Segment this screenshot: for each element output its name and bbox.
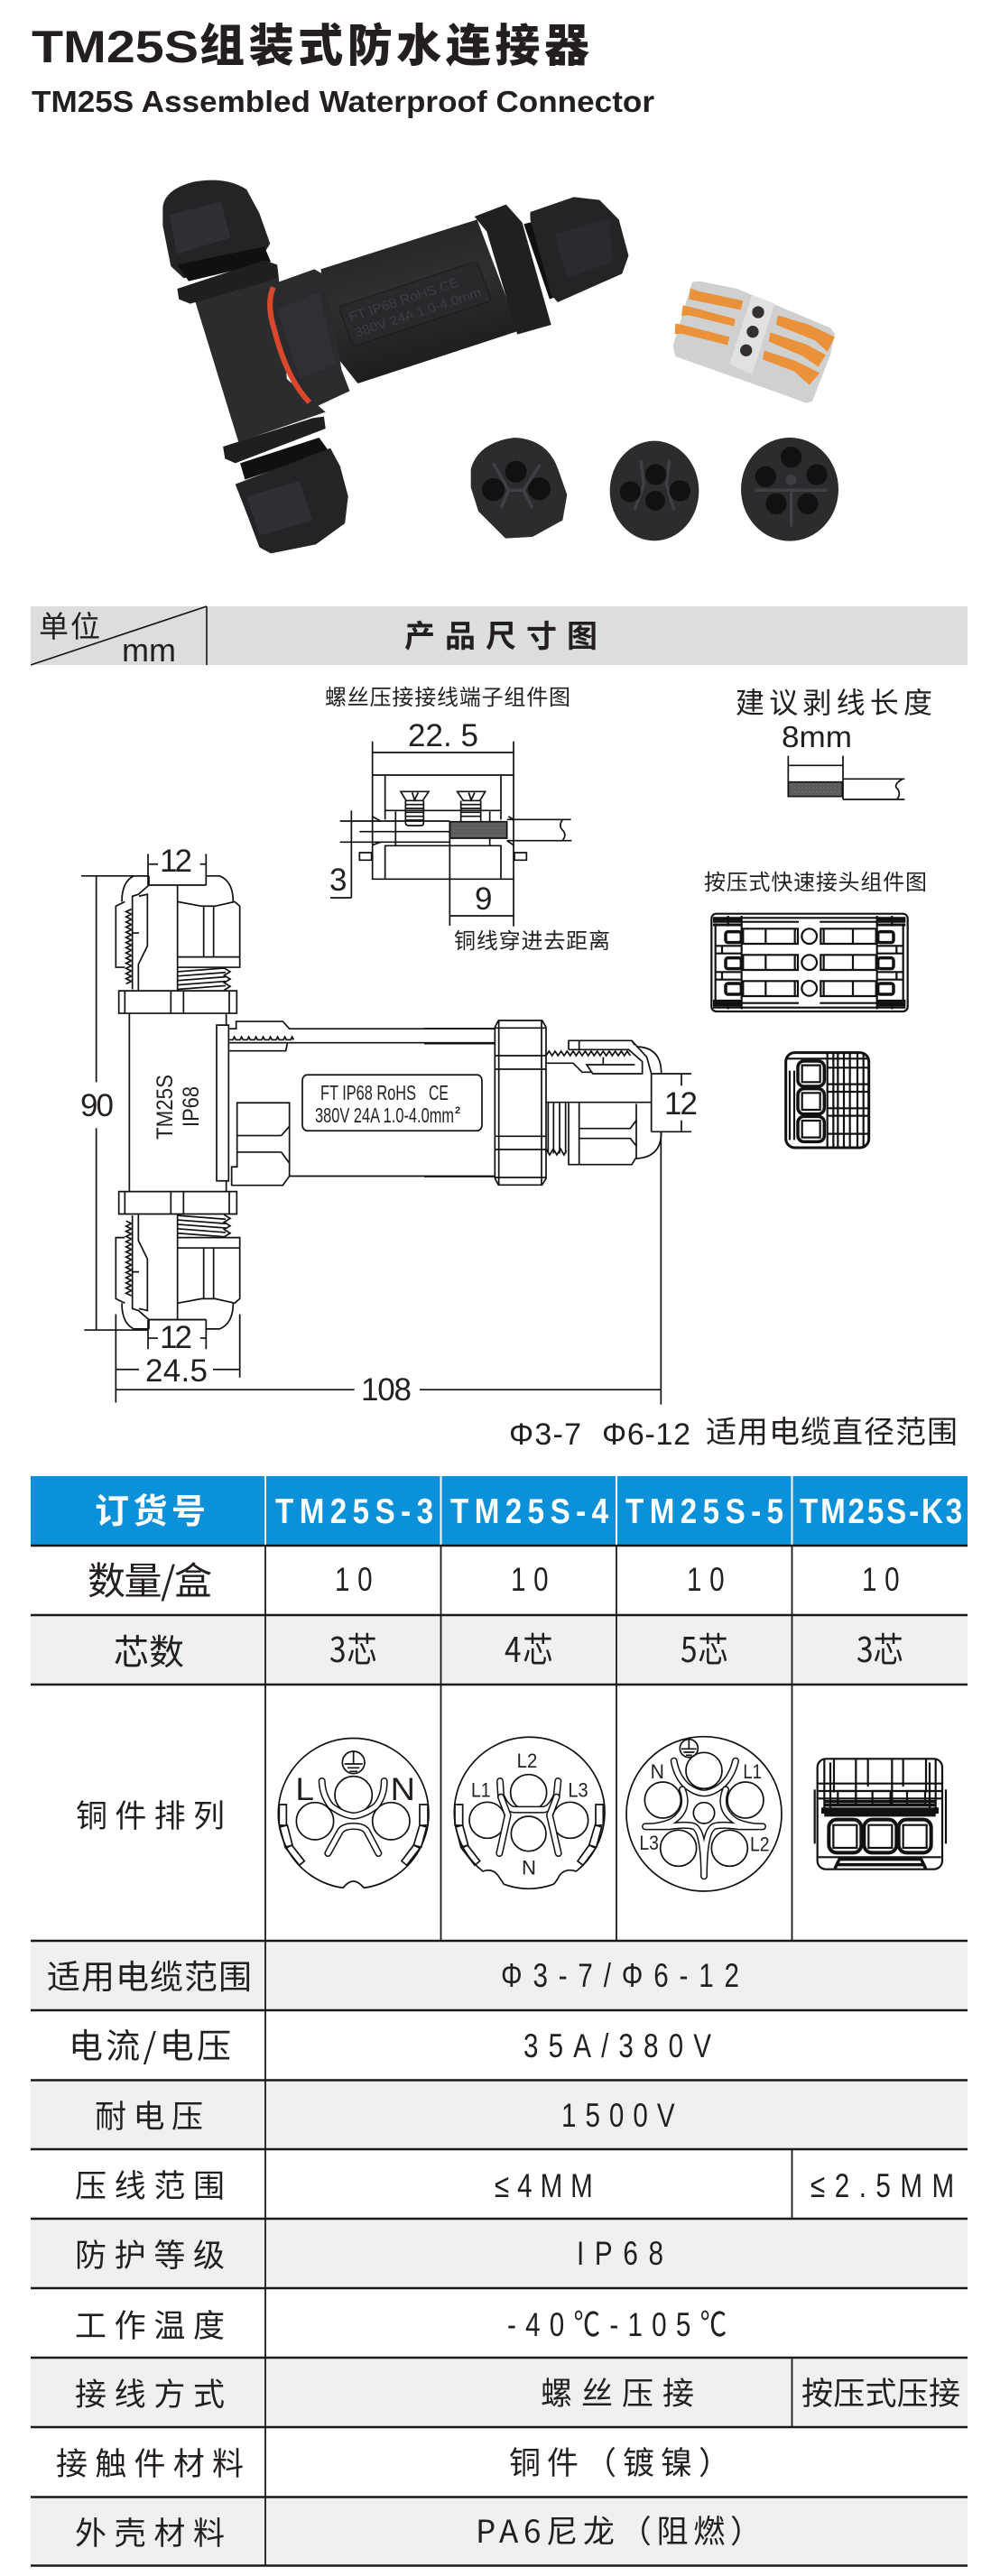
section header: product dimensions: 产品尺寸图 <box>404 612 597 656</box>
row: working temperature: -40℃-105℃ <box>507 2307 727 2344</box>
insert: 3-pole <box>471 438 567 539</box>
table header row: TM25S-K3 <box>800 1491 962 1531</box>
screw terminal assembly drawing <box>329 718 571 927</box>
row: core count: 4芯 <box>505 1622 553 1673</box>
strip length value: 8mm <box>782 720 852 753</box>
photo: push-in wire connector <box>673 282 835 403</box>
row: core count: 5芯 <box>681 1622 728 1673</box>
right flange <box>475 205 551 335</box>
subtitle: TM25S Assembled Waterproof Connector <box>32 85 654 118</box>
dimension: 90: 90 <box>80 1088 114 1123</box>
embossed label: 380V 24A 1.0-4.0mm <box>353 285 484 340</box>
row: current and voltage: 电流/电压 <box>69 2018 231 2068</box>
row: current and voltage: 35A/380V <box>523 2028 712 2065</box>
row: wire range: ≤2.5MM <box>810 2168 954 2205</box>
left hex nut <box>270 269 349 408</box>
row: protection grade <box>75 2230 663 2276</box>
dimension: 24.5: 24.5 <box>145 1353 208 1389</box>
pin diagram: 4-pole: L2 <box>517 1750 537 1772</box>
row: contact material <box>56 2438 730 2485</box>
specification table <box>31 1476 968 2566</box>
pin diagram: 5-pole: L3 <box>639 1832 659 1854</box>
pin diagram: 4-pole <box>454 1737 605 1888</box>
label text: FT IP68 RoHS CE: CE <box>429 1081 449 1104</box>
label text: FT IP68 RoHS CE: 380V 24A 1.0-4.0mm <box>315 1103 454 1127</box>
dimension: 12 right: 12 <box>664 1086 698 1122</box>
bottom flange <box>223 417 326 463</box>
title <box>32 10 589 75</box>
caption: copper wire insertion distance: 铜线穿进去距离 <box>454 923 610 955</box>
row: core count: 3芯 <box>329 1622 377 1673</box>
title: TM25S <box>32 22 199 72</box>
pin diagram: 4-pole: L1 <box>471 1778 491 1801</box>
row: housing material: PA6尼龙（阻燃） <box>476 2507 762 2553</box>
table header row: TM25S-3 <box>275 1491 433 1531</box>
row: copper arrangement label: 铜件排列 <box>76 1791 225 1837</box>
label text: FT IP68 RoHS CE: FT IP68 RoHS <box>320 1081 416 1104</box>
dimension lines <box>81 854 661 1402</box>
recommended strip length heading: 建议剥线长度 <box>736 680 932 722</box>
table header row: TM25S-4 <box>450 1491 608 1531</box>
pin diagram: 5-pole: L1 <box>743 1760 762 1783</box>
vertical T body <box>195 278 326 442</box>
row: wire range: 压线范围 <box>75 2161 225 2207</box>
label text: FT IP68 RoHS CE: 2 <box>455 1105 460 1116</box>
row: cable range: 适用电缆范围 <box>47 1950 252 1999</box>
cable range note: Φ3-7 <box>509 1417 581 1452</box>
cable range note: 适用电缆直径范围 <box>706 1408 958 1452</box>
row: wire range <box>75 2161 954 2207</box>
row: quantity per box: 10 <box>687 1562 725 1599</box>
pin diagram: 4-pole: N <box>522 1856 536 1879</box>
top flange <box>177 260 279 304</box>
stripped wire diagram <box>788 756 904 799</box>
row: contact material: 铜件（镀镍） <box>509 2438 730 2484</box>
row: contact material: 接触件材料 <box>56 2439 244 2485</box>
row: core count: 芯数 <box>114 1625 184 1676</box>
row: quantity per box: 10 <box>511 1562 549 1599</box>
row: wiring method: 按压式压接 <box>801 2368 960 2414</box>
dimension: 9: 9 <box>475 882 492 917</box>
row: protection grade: 防护等级 <box>75 2230 225 2276</box>
pin diagram: 5-pole: N <box>651 1760 664 1783</box>
title: 组装式防水连接器 <box>199 10 589 75</box>
embossed label <box>338 262 492 346</box>
right cable gland <box>530 197 628 302</box>
insert: 4-pole <box>610 441 699 540</box>
dimension: 108: 108 <box>361 1372 412 1408</box>
table header row: 订货号 <box>95 1483 206 1533</box>
neck thread <box>523 221 560 300</box>
row: current and voltage <box>69 2018 712 2068</box>
insert: 5-pole <box>741 438 838 541</box>
pin diagram: 5-pole: L2 <box>750 1833 770 1856</box>
row: core count <box>114 1622 903 1676</box>
push-in connector heading: 按压式快速接头组件图 <box>704 864 927 896</box>
row: quantity per box <box>88 1551 900 1606</box>
row: quantity per box: 数量/盒 <box>88 1551 212 1606</box>
row: cable range <box>47 1950 739 1999</box>
row: wiring method <box>75 2368 960 2415</box>
T body drawing <box>116 876 495 1329</box>
product photo: T-shaped black connector <box>162 180 628 553</box>
row: core count: 3芯 <box>857 1622 903 1673</box>
row: cable range: Φ3-7/Φ6-12 <box>501 1958 739 1995</box>
screw terminal heading: 螺丝压接接线端子组件图 <box>325 679 570 711</box>
dimension: 12 bottom: 12 <box>160 1320 192 1355</box>
row: protection grade: IP68 <box>577 2236 663 2273</box>
cable range note: Φ6-12 <box>602 1417 690 1452</box>
row: housing material <box>75 2507 762 2554</box>
table header row <box>31 1476 968 1546</box>
body marking TM25S IP68: TM25S <box>153 1075 178 1140</box>
cable range note <box>509 1408 958 1452</box>
section header: product dimensions <box>31 603 968 669</box>
row: working temperature: 工作温度 <box>75 2301 225 2347</box>
pin diagram: 3-pole: N <box>391 1772 415 1807</box>
body marking TM25S IP68 <box>153 1075 204 1140</box>
bottom cable gland <box>236 448 348 553</box>
embossed label: FT IP68 RoHS CE <box>347 275 461 325</box>
body marking TM25S IP68: IP68 <box>179 1086 204 1127</box>
row: withstand voltage <box>95 2091 675 2137</box>
push-in connector side view <box>786 1053 869 1148</box>
label text: FT IP68 RoHS CE <box>315 1081 460 1127</box>
photo: three contact inserts <box>471 438 838 541</box>
row: quantity per box: 10 <box>862 1562 900 1599</box>
unit cell: mm <box>122 632 176 669</box>
unit cell <box>31 603 207 669</box>
orange seal ring <box>270 287 310 402</box>
pin diagram: 3-pole: L <box>295 1772 314 1807</box>
row: quantity per box: 10 <box>335 1562 373 1599</box>
row: wiring method: 接线方式 <box>75 2369 225 2415</box>
row: withstand voltage: 耐电压 <box>95 2091 203 2137</box>
right flange and gland drawing <box>424 1020 691 1405</box>
row: withstand voltage: 1500V <box>561 2098 675 2135</box>
push-in connector top view <box>711 914 908 1011</box>
row: working temperature <box>75 2301 727 2347</box>
main cylinder <box>320 219 519 383</box>
row: wiring method: 螺丝压接 <box>541 2368 694 2414</box>
pin diagram: push-in K3 connector <box>815 1759 946 1870</box>
dimension: 22.5: 22. 5 <box>408 718 478 753</box>
row: wire range: ≤4MM <box>495 2168 593 2205</box>
row: housing material: 外壳材料 <box>75 2508 225 2554</box>
pin diagram: 3-pole <box>278 1738 429 1888</box>
pin diagram: 5-pole <box>626 1737 782 1891</box>
dimension: 3: 3 <box>329 863 347 898</box>
pin diagram: 4-pole: L3 <box>568 1778 588 1801</box>
dimension: 12 top: 12 <box>160 844 192 879</box>
bottom thread <box>240 438 329 480</box>
top cable gland <box>162 180 271 282</box>
main dimension drawing <box>80 844 698 1408</box>
unit cell: 单位 <box>39 603 100 646</box>
table header row: TM25S-5 <box>625 1491 783 1531</box>
